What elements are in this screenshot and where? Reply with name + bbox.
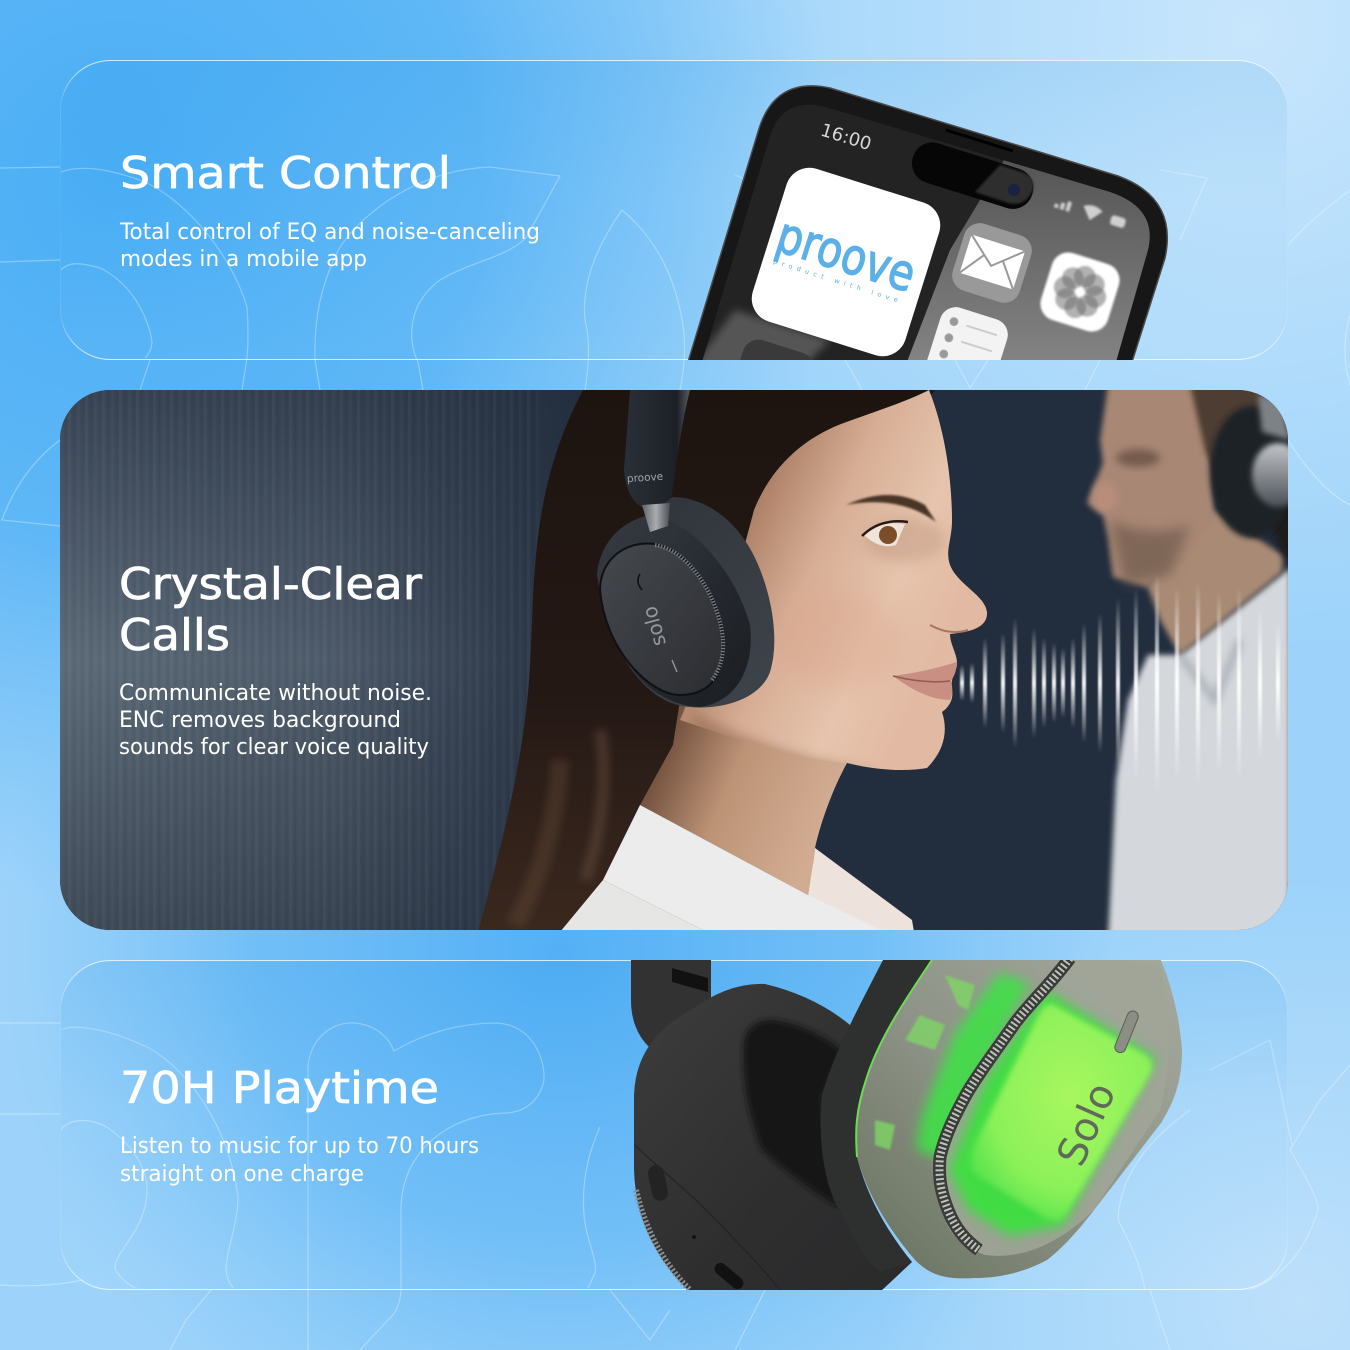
panel: 70h playtime	[60, 958, 1288, 1292]
screen reflection	[908, 160, 1150, 360]
green glow behind plate	[948, 990, 1155, 1236]
mesh dots	[939, 958, 1070, 1250]
panel: smart control	[60, 60, 1288, 360]
body text: smart control: Total control of EQ and noise-canceling	[119, 220, 540, 245]
body text: 70h playtime: Listen to music for up to 70 hours	[120, 1134, 479, 1159]
shell tabs	[875, 975, 975, 1150]
face shading	[690, 518, 945, 790]
stem	[642, 503, 670, 532]
man neck hair	[1262, 500, 1295, 565]
reminder rows	[939, 317, 997, 358]
green glow left	[916, 973, 1030, 1160]
shirt collar	[603, 805, 885, 932]
jaw shadow	[690, 710, 880, 790]
headphone illustration	[631, 958, 1182, 1292]
eye socket shadow	[865, 518, 945, 562]
camera dot	[1008, 184, 1020, 196]
app icon: mail	[952, 223, 1032, 303]
body text: crystal-clear calls: Communicate without noise.	[119, 681, 432, 706]
panel: crystal-clear calls	[60, 385, 1304, 940]
neck	[640, 690, 847, 895]
cheek blush	[780, 590, 900, 690]
app icon: dark tile	[740, 340, 810, 360]
petals	[1052, 264, 1108, 320]
headband	[624, 390, 690, 509]
woman's headphones	[597, 390, 774, 708]
left gradient	[60, 390, 536, 930]
iris	[879, 526, 897, 544]
phone body	[688, 86, 1167, 362]
mic hole	[692, 1235, 696, 1239]
ear cup plate	[600, 543, 723, 695]
man hair	[1190, 385, 1270, 490]
mesh arc	[655, 545, 723, 680]
photo scene	[60, 385, 1304, 940]
button mark	[638, 574, 642, 590]
panel backdrop	[60, 390, 1288, 930]
phone screen	[708, 105, 1004, 360]
phone illustration	[688, 85, 1168, 360]
proove logo: proove	[770, 206, 923, 304]
ear pad body	[634, 984, 912, 1292]
voice waveform	[960, 573, 1280, 793]
body text: smart control: modes in a mobile app	[120, 247, 367, 272]
hair highlights	[515, 730, 604, 925]
man headphone cushion	[1210, 406, 1294, 538]
mail tile	[952, 223, 1032, 303]
status time: 16:00	[818, 120, 874, 155]
photos tile	[1039, 251, 1121, 333]
app icon: proove	[752, 168, 940, 356]
mesh lower edge	[636, 1190, 690, 1290]
headband slot	[672, 968, 708, 992]
heading: 70h playtime: 70H Playtime	[120, 1063, 439, 1114]
back collar	[808, 848, 914, 932]
usb-c port	[712, 1260, 746, 1292]
side pill detail	[1113, 1009, 1140, 1054]
man in background	[1087, 385, 1304, 940]
woman	[478, 390, 987, 932]
nose shadow	[930, 625, 968, 632]
eye	[864, 523, 905, 546]
shirt lower	[560, 880, 707, 932]
heading: crystal-clear calls: Calls	[119, 610, 230, 661]
green edge highlight	[856, 960, 932, 1157]
vertical stripes	[60, 390, 540, 930]
logo tagline: product with love	[772, 257, 903, 306]
inner plate	[942, 958, 1169, 1256]
mouth line	[893, 676, 950, 682]
speaker ring	[821, 958, 934, 1272]
solo label: solo	[637, 604, 671, 649]
mesh ring	[939, 958, 1070, 1250]
face	[680, 390, 987, 770]
man headphone highlight	[1252, 443, 1304, 507]
green battery plate	[970, 1004, 1152, 1221]
body text: 70h playtime: straight on one charge	[120, 1162, 364, 1187]
status icons	[1052, 200, 1127, 229]
headband	[631, 958, 711, 1048]
solo label: Solo	[1049, 1076, 1125, 1173]
man nose highlight	[1093, 482, 1117, 512]
hair	[478, 390, 935, 932]
body text: crystal-clear calls: ENC removes background	[119, 708, 401, 733]
app icon: photos	[1039, 251, 1121, 333]
gradient fade	[202, 390, 660, 930]
man shirt fold	[1180, 640, 1240, 700]
headband brand: proove	[627, 471, 664, 485]
icon tile	[752, 168, 940, 356]
lips	[893, 662, 957, 700]
man neck	[1147, 510, 1283, 655]
app icon: reminders	[927, 307, 1008, 360]
man beard shadow	[1110, 520, 1190, 585]
heading: smart control: Smart Control	[120, 148, 451, 199]
heading: crystal-clear calls: Crystal-Clear	[119, 559, 423, 610]
body text: crystal-clear calls: sounds for clear voice quality	[119, 735, 429, 760]
translucent shell	[856, 958, 1182, 1278]
man face	[1087, 385, 1215, 587]
ear pad inner hole	[743, 1020, 842, 1207]
panel 1 glass card	[60, 60, 1288, 360]
panel 3 glass card	[60, 960, 1288, 1290]
ear cup body	[597, 515, 751, 707]
man shirt	[1108, 568, 1290, 940]
man headband	[1258, 395, 1290, 440]
envelope	[960, 235, 1025, 290]
button mark lower	[672, 660, 677, 672]
reminders tile	[927, 307, 1008, 360]
dynamic island	[912, 142, 1034, 209]
speaker slot	[946, 130, 1013, 151]
ear cup cushion	[597, 497, 774, 708]
green glow shape	[948, 990, 1155, 1236]
pad seam	[635, 1145, 780, 1290]
side button	[646, 1164, 670, 1202]
lower-left wallpaper	[702, 308, 830, 360]
eyelash line	[862, 521, 908, 536]
island reflected side	[975, 165, 1034, 204]
wallpaper shading	[702, 160, 1150, 360]
man eye shadow	[1116, 449, 1160, 467]
eyebrow	[846, 495, 936, 522]
